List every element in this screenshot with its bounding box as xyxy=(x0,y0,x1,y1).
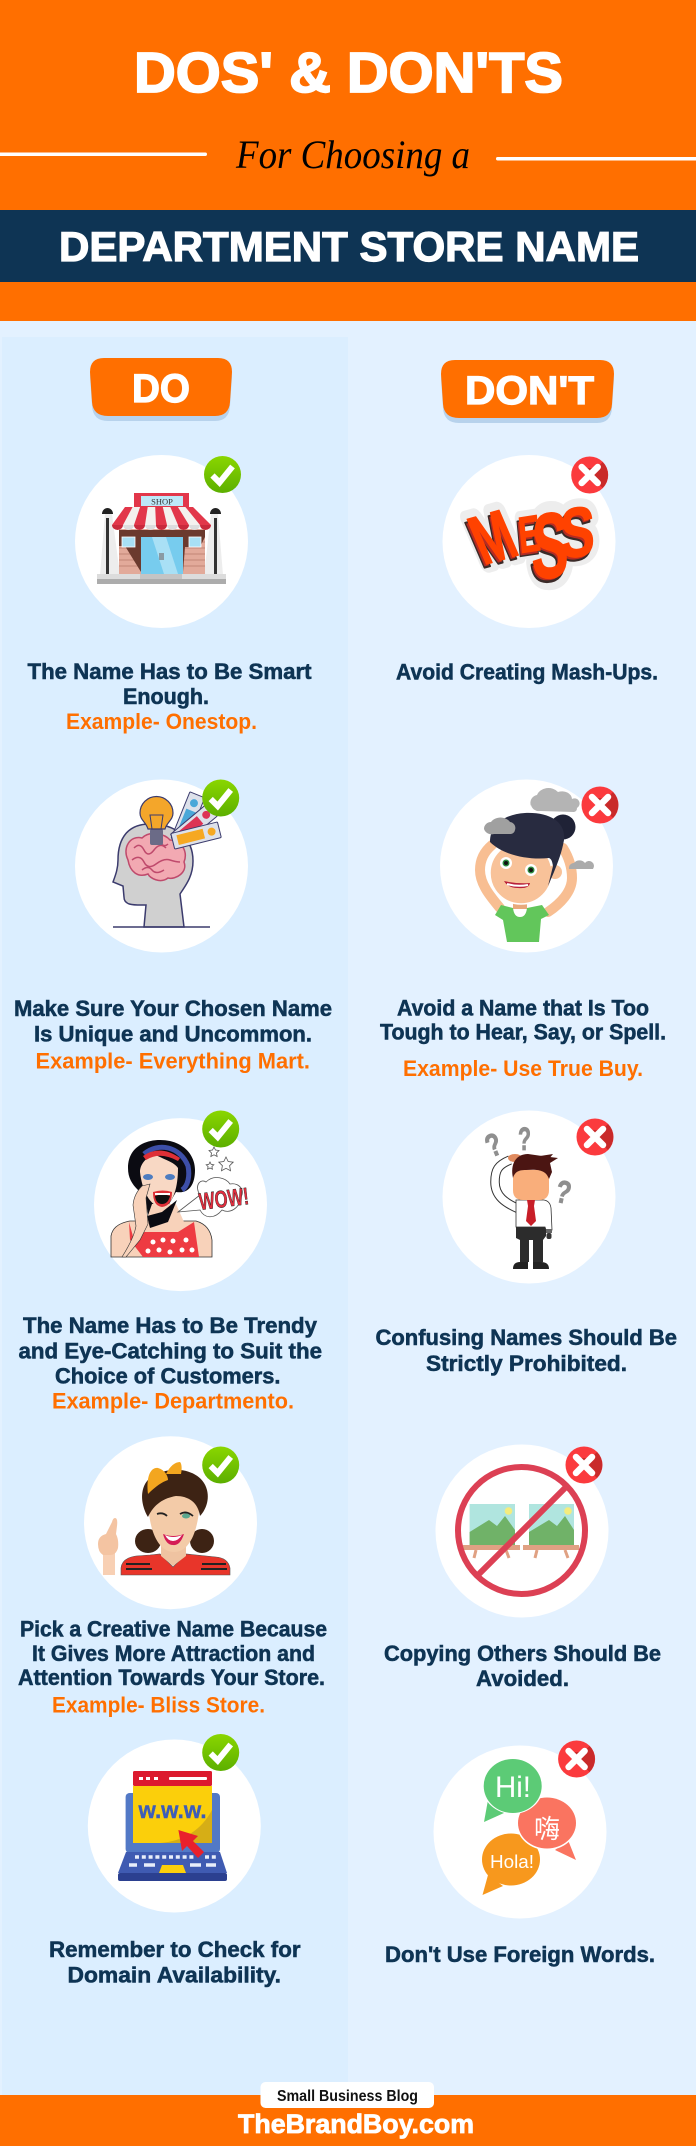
item: confused man: ? xyxy=(480,1125,507,1164)
badge: cross xyxy=(558,1740,595,1778)
header xyxy=(0,0,696,321)
item: mess circle: S xyxy=(532,494,568,599)
text: do 1: Example- Onestop. xyxy=(66,709,257,734)
badge: cross xyxy=(582,786,618,824)
badge: cross xyxy=(576,1118,614,1156)
text: dont 4 xyxy=(384,1641,661,1691)
item: mess circle: S xyxy=(558,496,593,577)
item: speech bubbles: 嗨 xyxy=(534,1814,560,1844)
do button xyxy=(90,358,232,421)
text: dont 2: Example- Use True Buy. xyxy=(403,1056,643,1081)
text: do 2: Example- Everything Mart. xyxy=(36,1048,310,1074)
footer label: Small Business Blog xyxy=(277,2088,418,2105)
item: mess circle: M xyxy=(456,498,526,582)
item: confused man: ? xyxy=(552,1173,575,1211)
text: do 3: Choice of Customers. xyxy=(55,1364,280,1388)
item: laptop with www: w.w.w. xyxy=(138,1797,206,1823)
text: dont 5: Don't Use Foreign Words. xyxy=(385,1942,655,1967)
text: do 5 xyxy=(49,1937,301,1988)
badge: cross xyxy=(566,1446,602,1484)
text: do 2 xyxy=(14,996,332,1074)
item: mess circle: E xyxy=(514,508,541,569)
item: surprised woman: WOW! xyxy=(197,1183,250,1216)
text: do 4: It Gives More Attraction and xyxy=(32,1641,315,1666)
text: do 1 xyxy=(28,659,312,734)
text: do 3: and Eye-Catching to Suit the xyxy=(18,1338,322,1364)
item: mess circle: S xyxy=(560,492,595,574)
text: do 4: Attention Towards Your Store. xyxy=(18,1665,325,1690)
item: smart name circle with shop icon xyxy=(75,455,248,628)
footer pill xyxy=(260,2082,434,2108)
text: dont 2 xyxy=(380,996,666,1081)
footer brand: TheBrandBoy.com xyxy=(238,2109,474,2139)
text: do 5: Remember to Check for xyxy=(49,1937,301,1962)
text: do 2: Is Unique and Uncommon. xyxy=(34,1022,312,1046)
do button: DO xyxy=(132,367,190,411)
item: no copying sign xyxy=(436,1444,608,1618)
text: do 4: Pick a Creative Name Because xyxy=(20,1616,327,1642)
item: mess circle: E xyxy=(516,505,543,565)
text: dont 3: Confusing Names Should Be xyxy=(376,1325,677,1350)
text: do 1: The Name Has to Be Smart xyxy=(28,659,312,684)
item: confused man: ? xyxy=(518,1121,531,1157)
item: mess circle: S xyxy=(560,492,595,574)
badge: check xyxy=(202,780,239,816)
text: dont 3 xyxy=(376,1325,677,1376)
item: surprised woman xyxy=(94,1118,267,1291)
text: dont 3: Strictly Prohibited. xyxy=(426,1351,627,1376)
badge: check xyxy=(202,1446,239,1484)
banner title: DEPARTMENT STORE NAME xyxy=(59,223,639,270)
badge: check xyxy=(202,1734,239,1771)
text: do 3: Example- Departmento. xyxy=(52,1388,294,1414)
text: dont 2: Avoid a Name that Is Too xyxy=(397,996,649,1020)
item: laptop with www xyxy=(88,1740,261,1912)
item: mess circle xyxy=(442,455,616,628)
badge: cross xyxy=(571,456,608,494)
item: mess circle: M xyxy=(458,495,528,579)
item: stressed girl xyxy=(440,780,613,952)
dont button xyxy=(441,360,614,423)
text: do 1: Enough. xyxy=(123,684,209,709)
item: mess circle: S xyxy=(530,497,566,602)
text: do 3: The Name Has to Be Trendy xyxy=(23,1313,318,1338)
text: do 4 xyxy=(18,1616,327,1718)
item: mess circle: S xyxy=(532,494,568,599)
text: do 2: Make Sure Your Chosen Name xyxy=(14,996,332,1021)
text: dont 1: Avoid Creating Mash-Ups. xyxy=(396,660,658,684)
text: dont 4: Avoided. xyxy=(476,1666,569,1691)
panel: do column xyxy=(2,337,348,2095)
item: speech bubbles xyxy=(434,1746,606,1918)
item: mess circle: M xyxy=(458,495,528,579)
text: dont 2: Tough to Hear, Say, or Spell. xyxy=(380,1020,666,1044)
text: do 4: Example- Bliss Store. xyxy=(52,1692,265,1718)
badge: check xyxy=(202,1110,239,1148)
badge: check xyxy=(204,456,241,493)
text: do 5: Domain Availability. xyxy=(68,1962,281,1988)
dont button: DON'T xyxy=(465,369,594,413)
item: winking woman xyxy=(84,1436,257,1609)
item: speech bubbles: Hi! xyxy=(495,1771,531,1804)
footer xyxy=(0,2082,696,2146)
subtitle: For Choosing a xyxy=(235,132,470,177)
text: do 3 xyxy=(18,1313,322,1414)
item: mess circle: E xyxy=(516,505,543,565)
item: speech bubbles: Hola! xyxy=(490,1852,534,1872)
text: dont 4: Copying Others Should Be xyxy=(384,1641,661,1666)
item: smart name circle with shop icon: SHOP xyxy=(151,496,173,506)
title: DOS' & DON'TS xyxy=(134,41,563,105)
item: confused man xyxy=(442,1110,616,1284)
item: head with brain xyxy=(75,780,248,952)
